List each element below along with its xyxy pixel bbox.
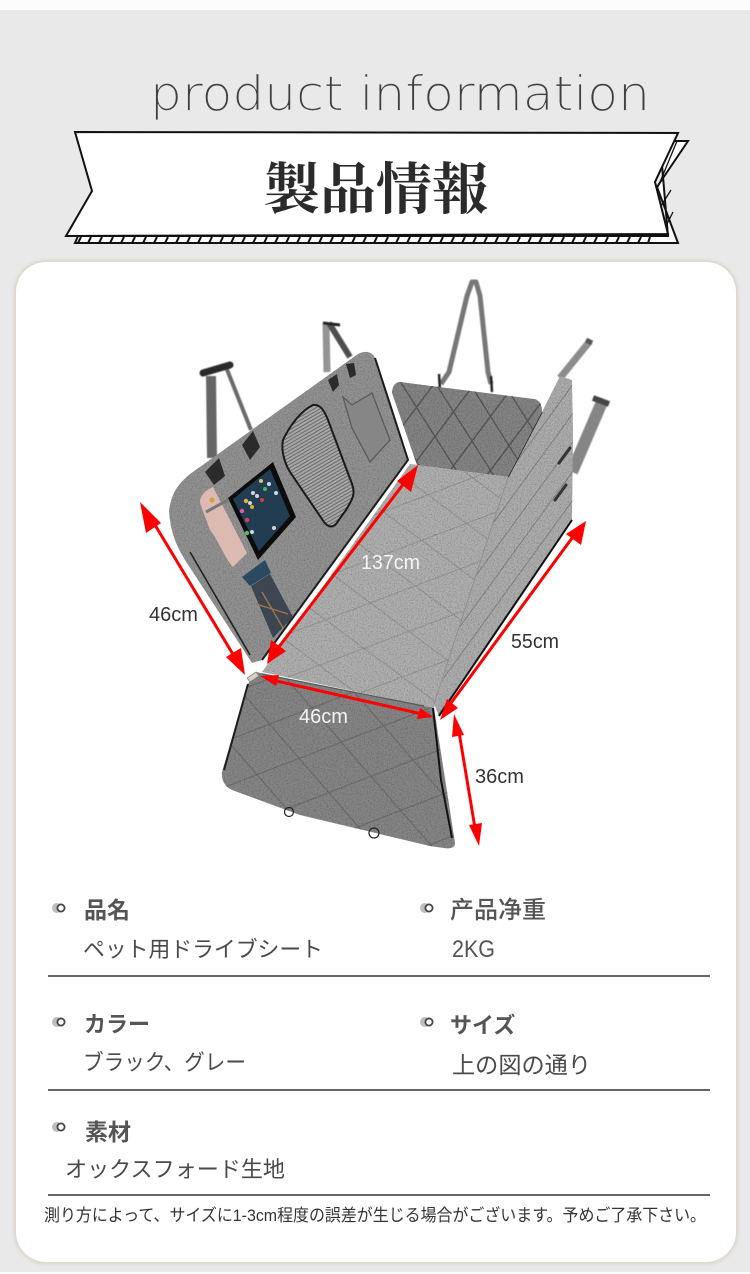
divider row 2 xyxy=(48,1089,710,1091)
ribbon back layer xyxy=(75,141,688,243)
bullet xyxy=(52,903,65,913)
bullet xyxy=(420,903,433,913)
value: ブラック、グレー: ブラック、グレー xyxy=(83,1050,246,1075)
bullet xyxy=(420,1017,433,1027)
strap: left panel buckle strap xyxy=(203,365,251,458)
dimension label: 36cm: 36cm xyxy=(475,766,524,788)
dimension label: 55cm: 55cm xyxy=(511,631,559,653)
pocket xyxy=(343,393,390,462)
value: ペット用ドライブシート: ペット用ドライブシート xyxy=(83,937,323,962)
product photo: pet seat cover xyxy=(169,282,609,848)
arrow: flap length xyxy=(452,714,482,846)
footnote: 測り方によって、サイズに1-3cm程度の誤差が生じる場合がございます。予めご了承下さい。 xyxy=(44,1205,706,1225)
seat floor xyxy=(262,464,508,708)
dimension label: 137cm: 137cm xyxy=(361,552,420,574)
strap: right wall straps xyxy=(560,340,609,472)
dimension label: 46cm left: 46cm xyxy=(149,604,198,626)
dimension label: 46cm front: 46cm xyxy=(299,706,348,728)
spec row: product name xyxy=(52,897,323,962)
right wall xyxy=(434,376,573,716)
ribbon front layer xyxy=(66,132,678,236)
divider row 1 xyxy=(48,975,710,977)
strap loops xyxy=(205,363,356,485)
strap: back wall hanging strap xyxy=(439,282,492,392)
spec row: material xyxy=(52,1119,285,1182)
spec row: net weight xyxy=(420,897,546,963)
bullet xyxy=(52,1017,65,1027)
ribbon banner with title xyxy=(66,132,688,243)
bottle and plaid umbrella xyxy=(242,560,293,638)
label: カラー: カラー xyxy=(84,1012,150,1037)
divider row 3 xyxy=(48,1194,710,1196)
strap: left panel top strap xyxy=(323,323,350,372)
front flap xyxy=(222,672,455,848)
arrow: seat length xyxy=(267,465,418,664)
pink umbrella in pocket xyxy=(200,487,247,567)
dimension arrows xyxy=(140,465,586,846)
zipper tab xyxy=(247,672,259,682)
tablet xyxy=(228,462,296,560)
label: 品名: 品名 xyxy=(84,897,130,923)
arrow: seat front width xyxy=(260,675,433,719)
english heading: product information: product information xyxy=(150,67,650,122)
arrow: left panel height xyxy=(140,502,245,675)
value: 上の図の通り: 上の図の通り xyxy=(452,1052,591,1078)
straps xyxy=(203,282,609,472)
white product card xyxy=(14,260,738,1264)
mesh window xyxy=(282,405,354,526)
label: 产品净重: 产品净重 xyxy=(450,897,546,924)
arrow: side wall width xyxy=(440,521,586,720)
spec row: colour xyxy=(52,1012,246,1075)
label: サイズ: サイズ xyxy=(450,1013,515,1038)
label: 素材: 素材 xyxy=(85,1119,131,1145)
d-rings xyxy=(284,808,379,838)
value: オックスフォード生地: オックスフォード生地 xyxy=(65,1157,285,1182)
spec row: size xyxy=(420,1013,591,1078)
left door panel xyxy=(169,352,408,682)
back wall xyxy=(392,382,542,477)
value: 2KG: 2KG xyxy=(452,936,495,963)
title: 製品情報: 製品情報 xyxy=(264,146,488,226)
bullet xyxy=(52,1122,65,1132)
